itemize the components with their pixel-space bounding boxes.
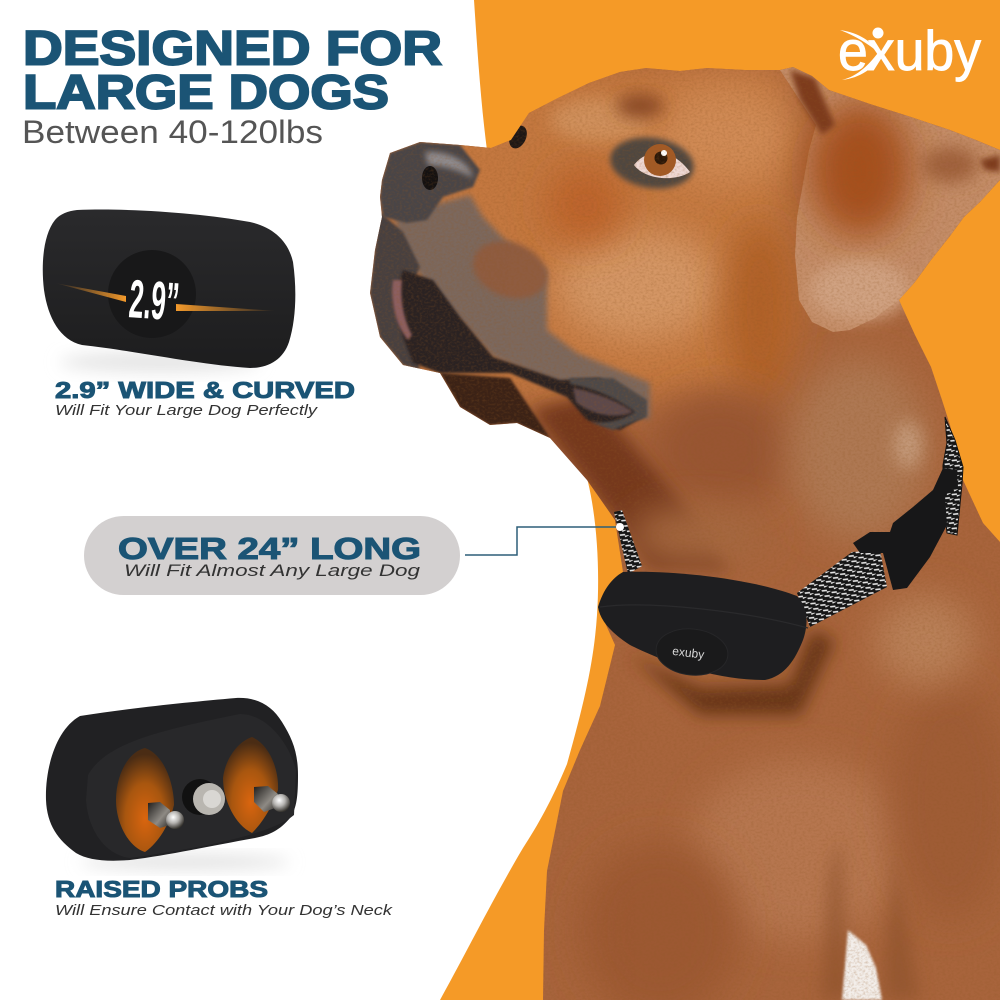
width label: 2.9”: [127, 269, 181, 333]
far eye: [509, 126, 527, 148]
device shadow: [60, 352, 260, 372]
feature heading: 2.9” WIDE & CURVED: [55, 377, 355, 403]
nose: [380, 142, 480, 223]
logo: exuby: [838, 19, 981, 82]
centre knurl inner: [203, 790, 221, 808]
fur texture: [360, 60, 1000, 1000]
device body: [43, 210, 295, 368]
far strap: [614, 510, 642, 574]
lower lip band: [570, 378, 647, 430]
centre disc: [108, 250, 196, 338]
nostril: [422, 166, 438, 190]
ear shading: [790, 70, 1000, 320]
lip pink: [392, 280, 412, 340]
feature: wide and curved: [55, 377, 355, 419]
right contact leaf: [223, 737, 278, 833]
pupil: [654, 152, 668, 164]
eye white: [634, 153, 690, 178]
product: rear view with probes: [46, 698, 298, 869]
collar strap: [797, 550, 887, 627]
mouth inner: [573, 388, 633, 416]
feature heading: RAISED PROBS: [55, 876, 268, 902]
rear body: [46, 698, 298, 861]
left probe: [148, 802, 184, 829]
dog base coat: [360, 60, 1000, 1000]
title line 1: DESIGNED FOR: [23, 22, 442, 76]
ear: [780, 67, 1000, 332]
iris: [644, 144, 676, 176]
right probe: [254, 786, 290, 812]
callout heading: OVER 24” LONG: [118, 531, 421, 566]
whisker patch: [472, 240, 549, 300]
callout pill: over 24 inch long: [84, 516, 460, 595]
eye surround: [607, 132, 697, 194]
feature caption: Will Ensure Contact with Your Dog’s Neck: [55, 902, 394, 919]
white chest patch: [842, 930, 882, 1000]
eye glint: [661, 150, 667, 156]
buckle: [853, 468, 958, 590]
callout caption: Will Fit Almost Any Large Dog: [124, 561, 421, 580]
muzzle grey: [395, 195, 650, 420]
device logo: exuby: [672, 644, 705, 662]
nose highlight: [425, 152, 473, 178]
dog fur shading: [380, 60, 1000, 1000]
left contact leaf: [116, 748, 174, 852]
orange curved background panel: [440, 0, 1000, 1000]
product: front view: [43, 210, 295, 372]
feature: raised probes: [55, 876, 394, 919]
rear shadow: [80, 855, 290, 869]
connector line: [465, 523, 624, 555]
centre post: [182, 779, 218, 815]
title: [22, 22, 442, 150]
collar device: [598, 572, 808, 680]
upper right strap: [943, 417, 963, 535]
subtitle: Between 40-120lbs: [22, 114, 323, 150]
dog photo illustration: [360, 60, 1000, 1000]
right stripe: [176, 304, 277, 311]
left stripe: [55, 283, 126, 302]
centre knurl: [193, 783, 225, 815]
device logo disc: [654, 625, 730, 679]
mouth opening: [393, 270, 643, 430]
dark outer lip: [370, 212, 420, 370]
feature caption: Will Fit Your Large Dog Perfectly: [55, 402, 319, 419]
title line 2: LARGE DOGS: [23, 66, 389, 120]
rear face: [86, 714, 296, 858]
under jaw: [440, 373, 550, 438]
